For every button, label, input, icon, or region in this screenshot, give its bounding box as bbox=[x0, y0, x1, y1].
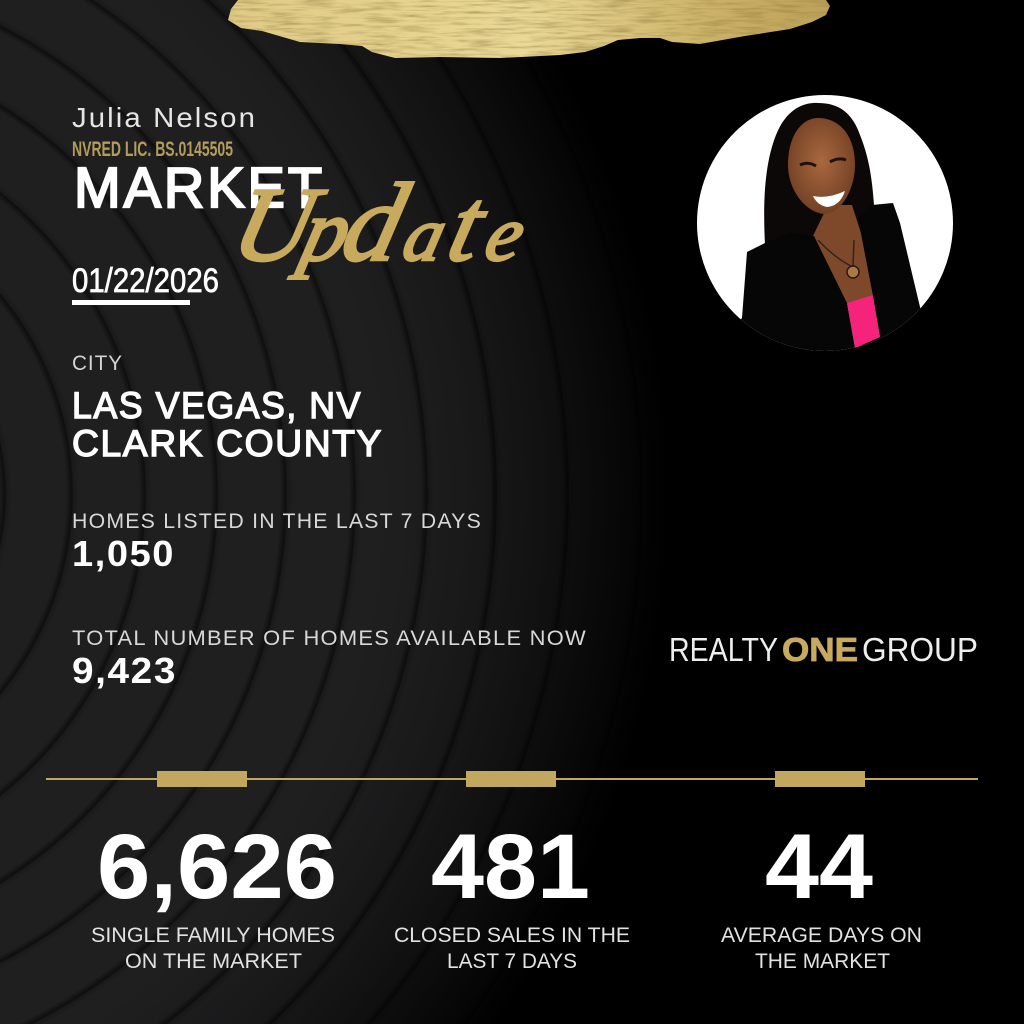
stat: single family homes: SINGLE FAMILY HOMES bbox=[91, 924, 335, 947]
gold brush stroke bbox=[228, 0, 830, 58]
heading: update script: U bbox=[222, 166, 334, 284]
heading: update script: p bbox=[287, 182, 361, 280]
stat: closed sales: LAST 7 DAYS bbox=[447, 950, 577, 973]
heading: update script: d bbox=[332, 161, 420, 285]
stat: homes listed: 1,050 bbox=[72, 533, 175, 574]
stat: total homes: TOTAL NUMBER OF HOMES AVAILABLE NOW bbox=[72, 627, 587, 650]
city name: LAS VEGAS, NV bbox=[72, 385, 362, 426]
face bbox=[788, 118, 855, 214]
stat: total homes bbox=[72, 627, 587, 691]
stat: closed sales bbox=[394, 816, 630, 973]
agent portrait bbox=[697, 95, 953, 360]
stat: average days on market: 44 bbox=[765, 816, 873, 918]
divider with tabs bbox=[46, 771, 978, 787]
blazer right bbox=[858, 203, 920, 347]
city label: CITY bbox=[72, 352, 123, 375]
smile bbox=[813, 191, 845, 207]
heading: update script: t bbox=[438, 167, 499, 283]
agent name: Julia Nelson bbox=[72, 102, 257, 133]
stat: single family homes: 6,626 bbox=[97, 816, 337, 918]
eyes bbox=[800, 159, 846, 166]
heading: update script: a bbox=[396, 192, 455, 277]
pink top bbox=[847, 295, 880, 348]
stat: closed sales: 481 bbox=[431, 816, 590, 918]
heading: update script: e bbox=[478, 191, 534, 278]
stat: single family homes bbox=[91, 816, 337, 973]
heading: market: MARKET bbox=[74, 156, 325, 220]
hair bbox=[764, 102, 874, 244]
stat: closed sales: CLOSED SALES IN THE bbox=[394, 924, 630, 947]
necklace bbox=[818, 240, 854, 266]
date: 01/22/2026 bbox=[72, 262, 219, 300]
stat: total homes: 9,423 bbox=[72, 650, 177, 691]
stat: homes listed bbox=[72, 510, 482, 574]
city name bbox=[72, 385, 383, 464]
stat: average days on market bbox=[721, 816, 922, 973]
stat: single family homes: ON THE MARKET bbox=[125, 950, 302, 973]
logo: realty one group: REALTY bbox=[669, 631, 778, 668]
logo: realty one group: GROUP bbox=[862, 631, 978, 668]
logo: realty one group: ONE bbox=[782, 631, 858, 668]
city name: CLARK COUNTY bbox=[72, 423, 383, 464]
stat: average days on market: AVERAGE DAYS ON bbox=[721, 924, 922, 947]
pendant bbox=[847, 266, 859, 278]
stat: average days on market: THE MARKET bbox=[755, 950, 890, 973]
license number: NVRED LIC. BS.0145505 bbox=[72, 138, 233, 161]
skin: neck and chest bbox=[813, 205, 874, 304]
logo: realty one group bbox=[669, 631, 978, 668]
stat: homes listed: HOMES LISTED IN THE LAST 7 DAYS bbox=[72, 510, 482, 533]
blazer left bbox=[740, 236, 855, 351]
